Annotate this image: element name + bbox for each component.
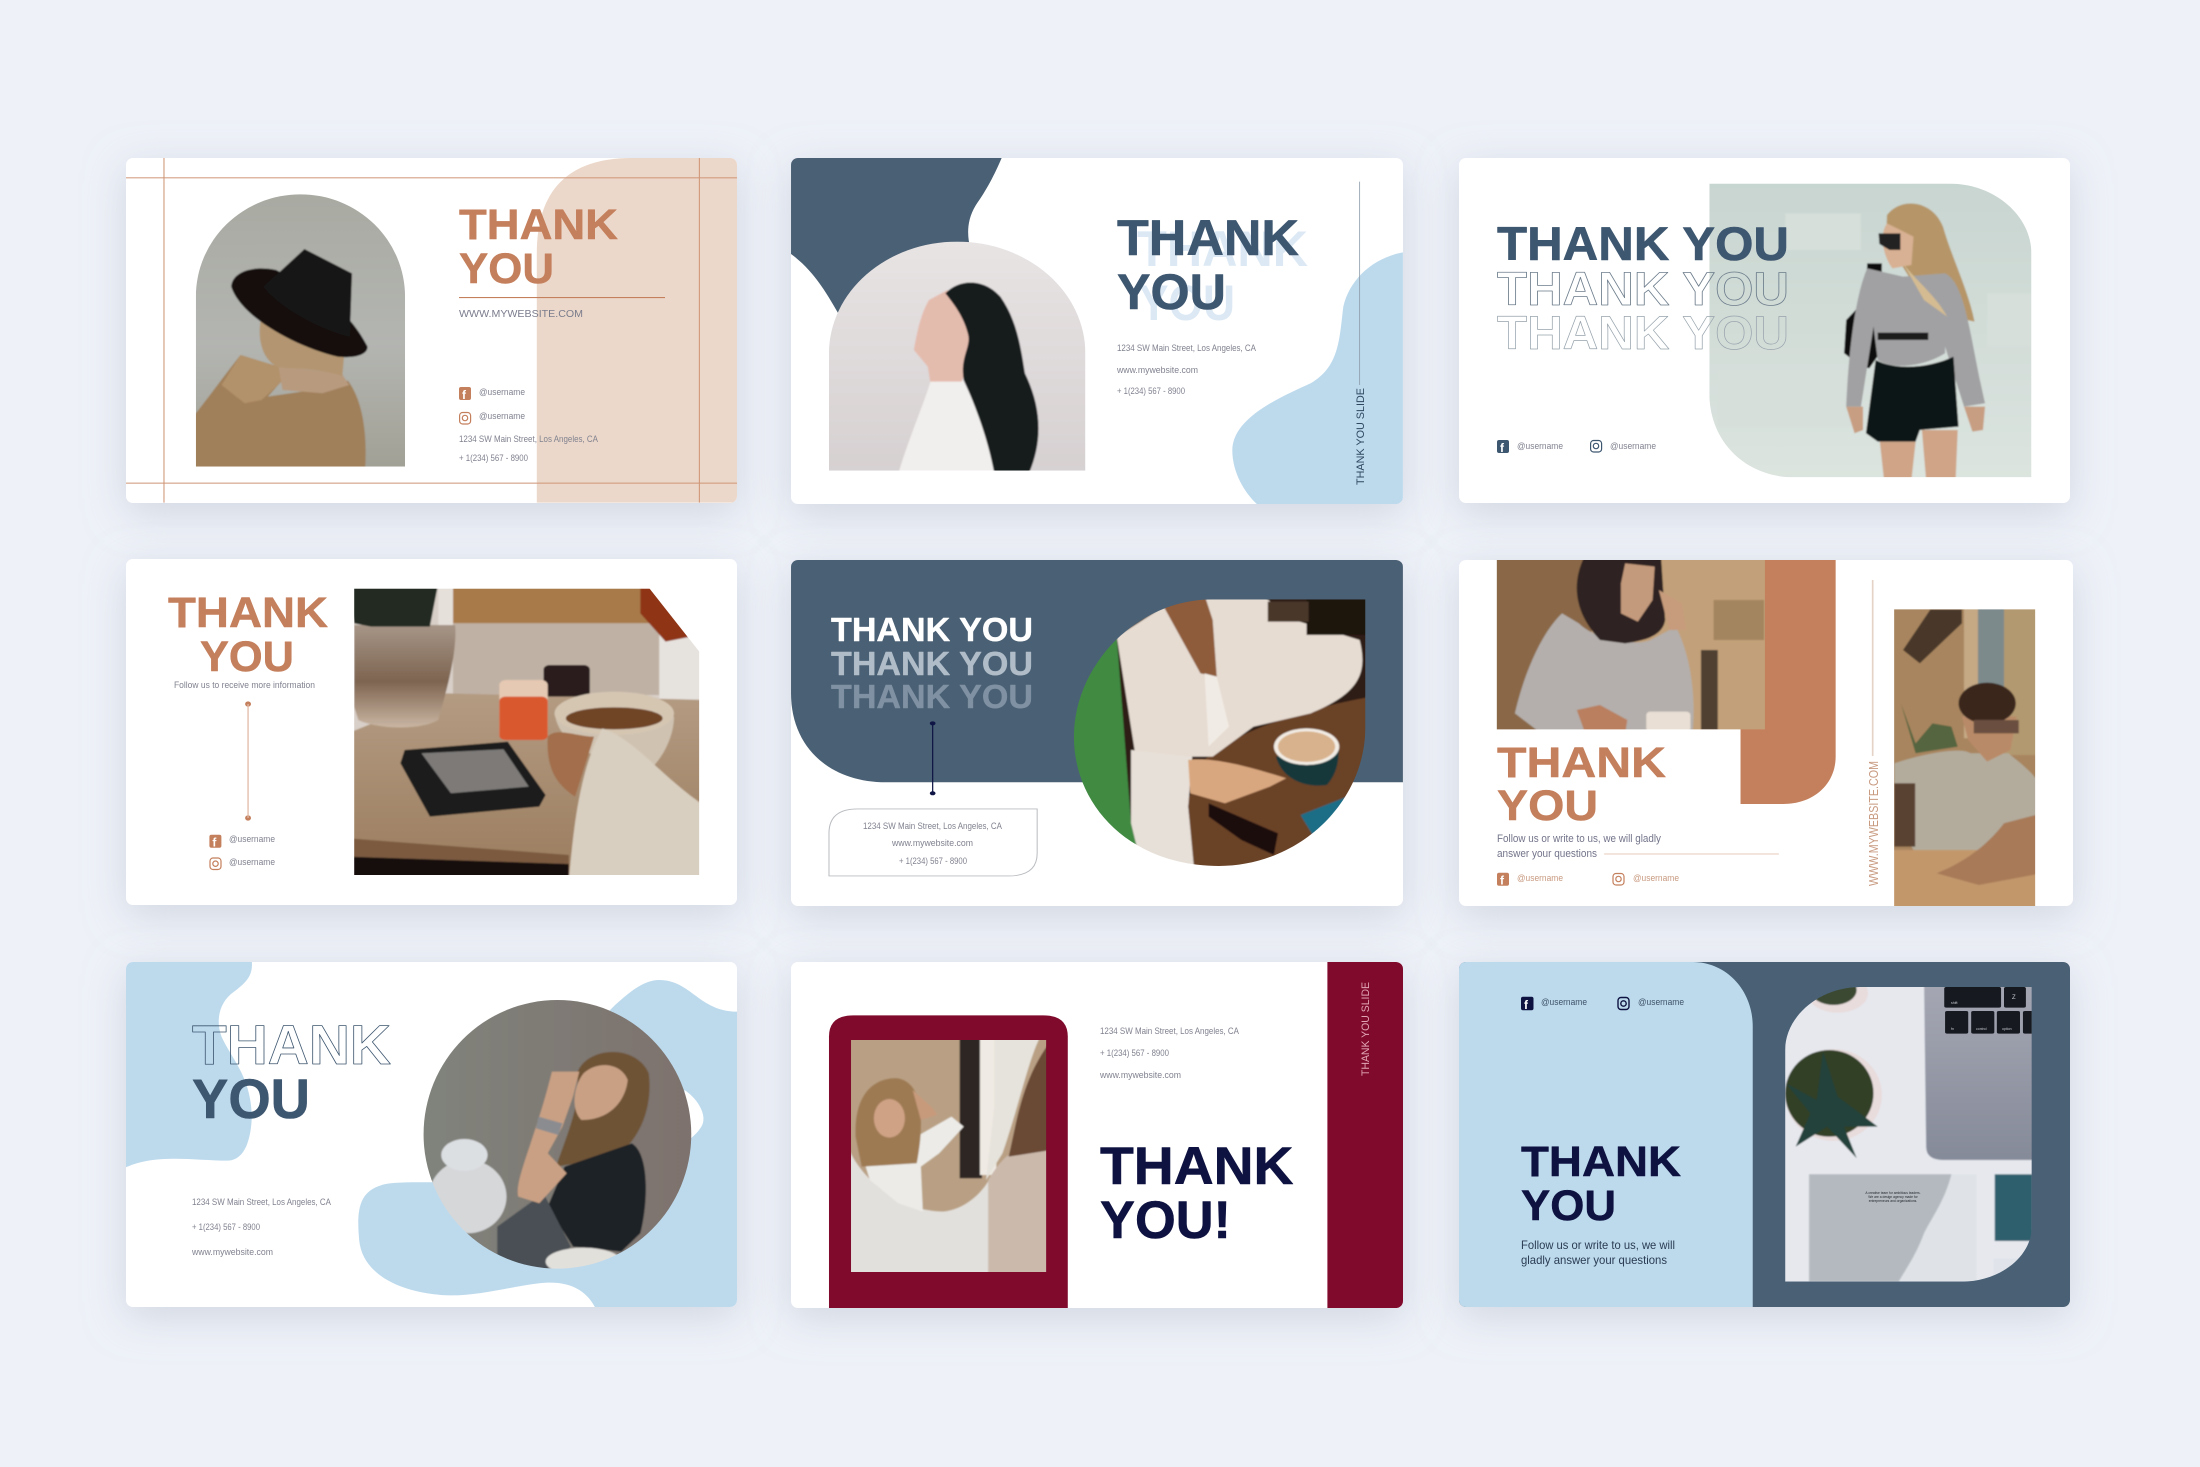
follow text: Follow us or write to us, we will gladly [1497,833,1661,845]
vertical rule [1872,580,1874,756]
photo: woman with dark hair [823,237,1092,475]
title 1: THANK YOU [831,611,1033,648]
photo: woman writing [1491,555,1773,735]
title: YOU [1497,782,1598,830]
icon: instagram [210,858,221,870]
printed card caption: We are a design agency made for [1868,1195,1919,1199]
photo: candle and tea on table [348,583,706,880]
photo: woman in black hat [190,190,411,470]
shadow title: YOU [1139,275,1235,331]
title: THANK [1521,1138,1681,1186]
icon: facebook: f [212,836,217,850]
username 1: @username [1517,873,1563,884]
shadow title [1138,231,1308,320]
phone: + 1(234) 567 - 8900 [1117,386,1185,397]
outlined title 3: THANK YOU [1497,306,1789,359]
title: thank you: YOU [459,245,554,293]
address: 1234 SW Main Street, Los Angeles, CA [1117,343,1257,354]
icon: instagram [1618,998,1629,1010]
title: thank you [459,209,618,284]
panel: slide 1 terracotta hat woman [126,158,737,503]
username 2: @username [1638,997,1684,1008]
title: YOU [1117,264,1226,320]
address: 1234 SW Main Street, Los Angeles, CA [863,821,1003,832]
keyboard labels: control [1976,1027,1987,1031]
username 1: @username [479,387,525,398]
keyboard labels: Z [2012,995,2016,1001]
phone: + 1(234) 567 - 8900 [899,856,967,867]
icon: facebook: f [1500,441,1505,455]
panel: slide 4 cosy table photo [126,559,737,905]
address: 1234 SW Main Street, Los Angeles, CA [1100,1026,1240,1037]
divider line [1604,853,1779,855]
title [1100,1137,1294,1250]
username 1: @username [1541,997,1587,1008]
vertical label: THANK YOU SLIDE [1355,388,1367,485]
dark blob [791,158,1002,315]
username 2: @username [479,411,525,422]
burgundy photo frame [829,1015,1068,1310]
keyboard labels [1951,995,2016,1031]
website: www.mywebsite.com [1099,1070,1181,1081]
keyboard labels: fn [1951,1027,1954,1031]
right blue blob [358,980,737,1307]
white notch [685,1090,703,1142]
outlined title 2: THANK YOU [1497,262,1789,315]
shadow title: THANK [1137,221,1308,277]
title [1521,1138,1681,1230]
title: YOU! [1100,1191,1231,1250]
phone: + 1(234) 567 - 8900 [459,453,528,464]
website: www.mywebsite.com [191,1247,273,1258]
panel: slide 6 two photos terracotta [1459,555,2073,910]
photo: woman by sculpture [417,995,699,1276]
photo: walking woman [1703,178,2038,483]
title [1117,220,1299,310]
light blue blob [1232,252,1403,504]
vertical label: THANK YOU SLIDE [1360,982,1372,1076]
website: www.mywebsite.com [891,838,973,849]
follow text: Follow us to receive more information [174,680,315,691]
follow text [1521,1238,1675,1267]
light blue panel [1459,962,1753,1307]
dark header shape [791,560,1403,782]
follow text: gladly answer your questions [1521,1253,1667,1267]
outlined title word: THANK [192,1013,391,1076]
icon: instagram [460,412,471,424]
burgundy side band [1327,960,1405,1310]
icon: facebook [1521,997,1534,1012]
title [168,589,328,681]
username 2: @username [1633,873,1679,884]
title: YOU [200,633,294,681]
username 2: @username [229,857,275,868]
left blue blob [126,962,252,1167]
icon: facebook [459,387,471,400]
photo: woman at mirror [845,1035,1051,1277]
icon: facebook [1497,873,1509,888]
website: www.mywebsite.com [1116,365,1198,376]
panel: slide 5 dark header coffee photo [791,560,1403,906]
title: YOU [1521,1182,1616,1230]
username 2: @username [1610,441,1656,452]
keyboard labels: option [2002,1027,2012,1031]
icon: instagram [1613,874,1624,885]
title: THANK [1497,739,1666,787]
title: THANK [1100,1137,1294,1196]
photo: man with glasses [1888,605,2042,910]
title 3: THANK YOU [831,678,1033,715]
icon: facebook: f [1524,998,1529,1012]
keyboard labels: shift [1951,1001,1957,1005]
phone: + 1(234) 567 - 8900 [192,1222,260,1233]
title: THANK [1117,210,1299,266]
username 1: @username [229,834,275,845]
icon: facebook [1497,440,1509,455]
title 2: THANK YOU [831,645,1033,682]
icon: facebook: f [462,388,467,402]
address: 1234 SW Main Street, Los Angeles, CA [459,434,599,445]
printed card caption [1865,1191,1921,1203]
phone: + 1(234) 567 - 8900 [1100,1048,1169,1059]
printed card caption: A creative team for ambitious leaders. [1865,1191,1921,1195]
panel: slide 2 blue blob portrait [791,158,1403,504]
panel: slide 7 outlined blue blobs [126,962,737,1307]
photo: desk with plant and laptop [1779,974,2038,1287]
icon: instagram [1591,440,1602,452]
panel: slide 8 burgundy mirror [791,960,1405,1310]
title [1497,739,1666,830]
address: 1234 SW Main Street, Los Angeles, CA [192,1197,332,1208]
connector line and dots [930,721,936,795]
printed card caption: entrepreneurs and organizations. [1869,1199,1917,1203]
photo: woman with coffee [1068,595,1372,872]
title: THANK YOU [1497,217,1789,270]
contact box [829,809,1037,876]
divider and website: WWW.MYWEBSITE.COM [459,308,583,320]
panel: slide 3 outlined repeated title [1459,158,2070,503]
frame lines [126,158,737,503]
terracotta block [1741,560,1836,804]
icon: facebook [209,835,221,850]
filled title word: YOU [192,1067,310,1130]
icon: facebook: f [1500,874,1505,888]
vertical website: WWW.MYWEBSITE.COM [1866,761,1881,886]
follow text [1497,833,1661,860]
title: THANK [168,589,328,637]
follow text: answer your questions [1497,848,1597,860]
vertical rule [1359,182,1360,385]
connector dots and line [245,701,251,821]
username 1: @username [1517,441,1563,452]
follow text: Follow us or write to us, we will [1521,1238,1675,1252]
peach background shape [537,158,737,503]
title: thank you: THANK [459,201,618,249]
panel: slide 9 desk flat lay [1459,962,2070,1307]
